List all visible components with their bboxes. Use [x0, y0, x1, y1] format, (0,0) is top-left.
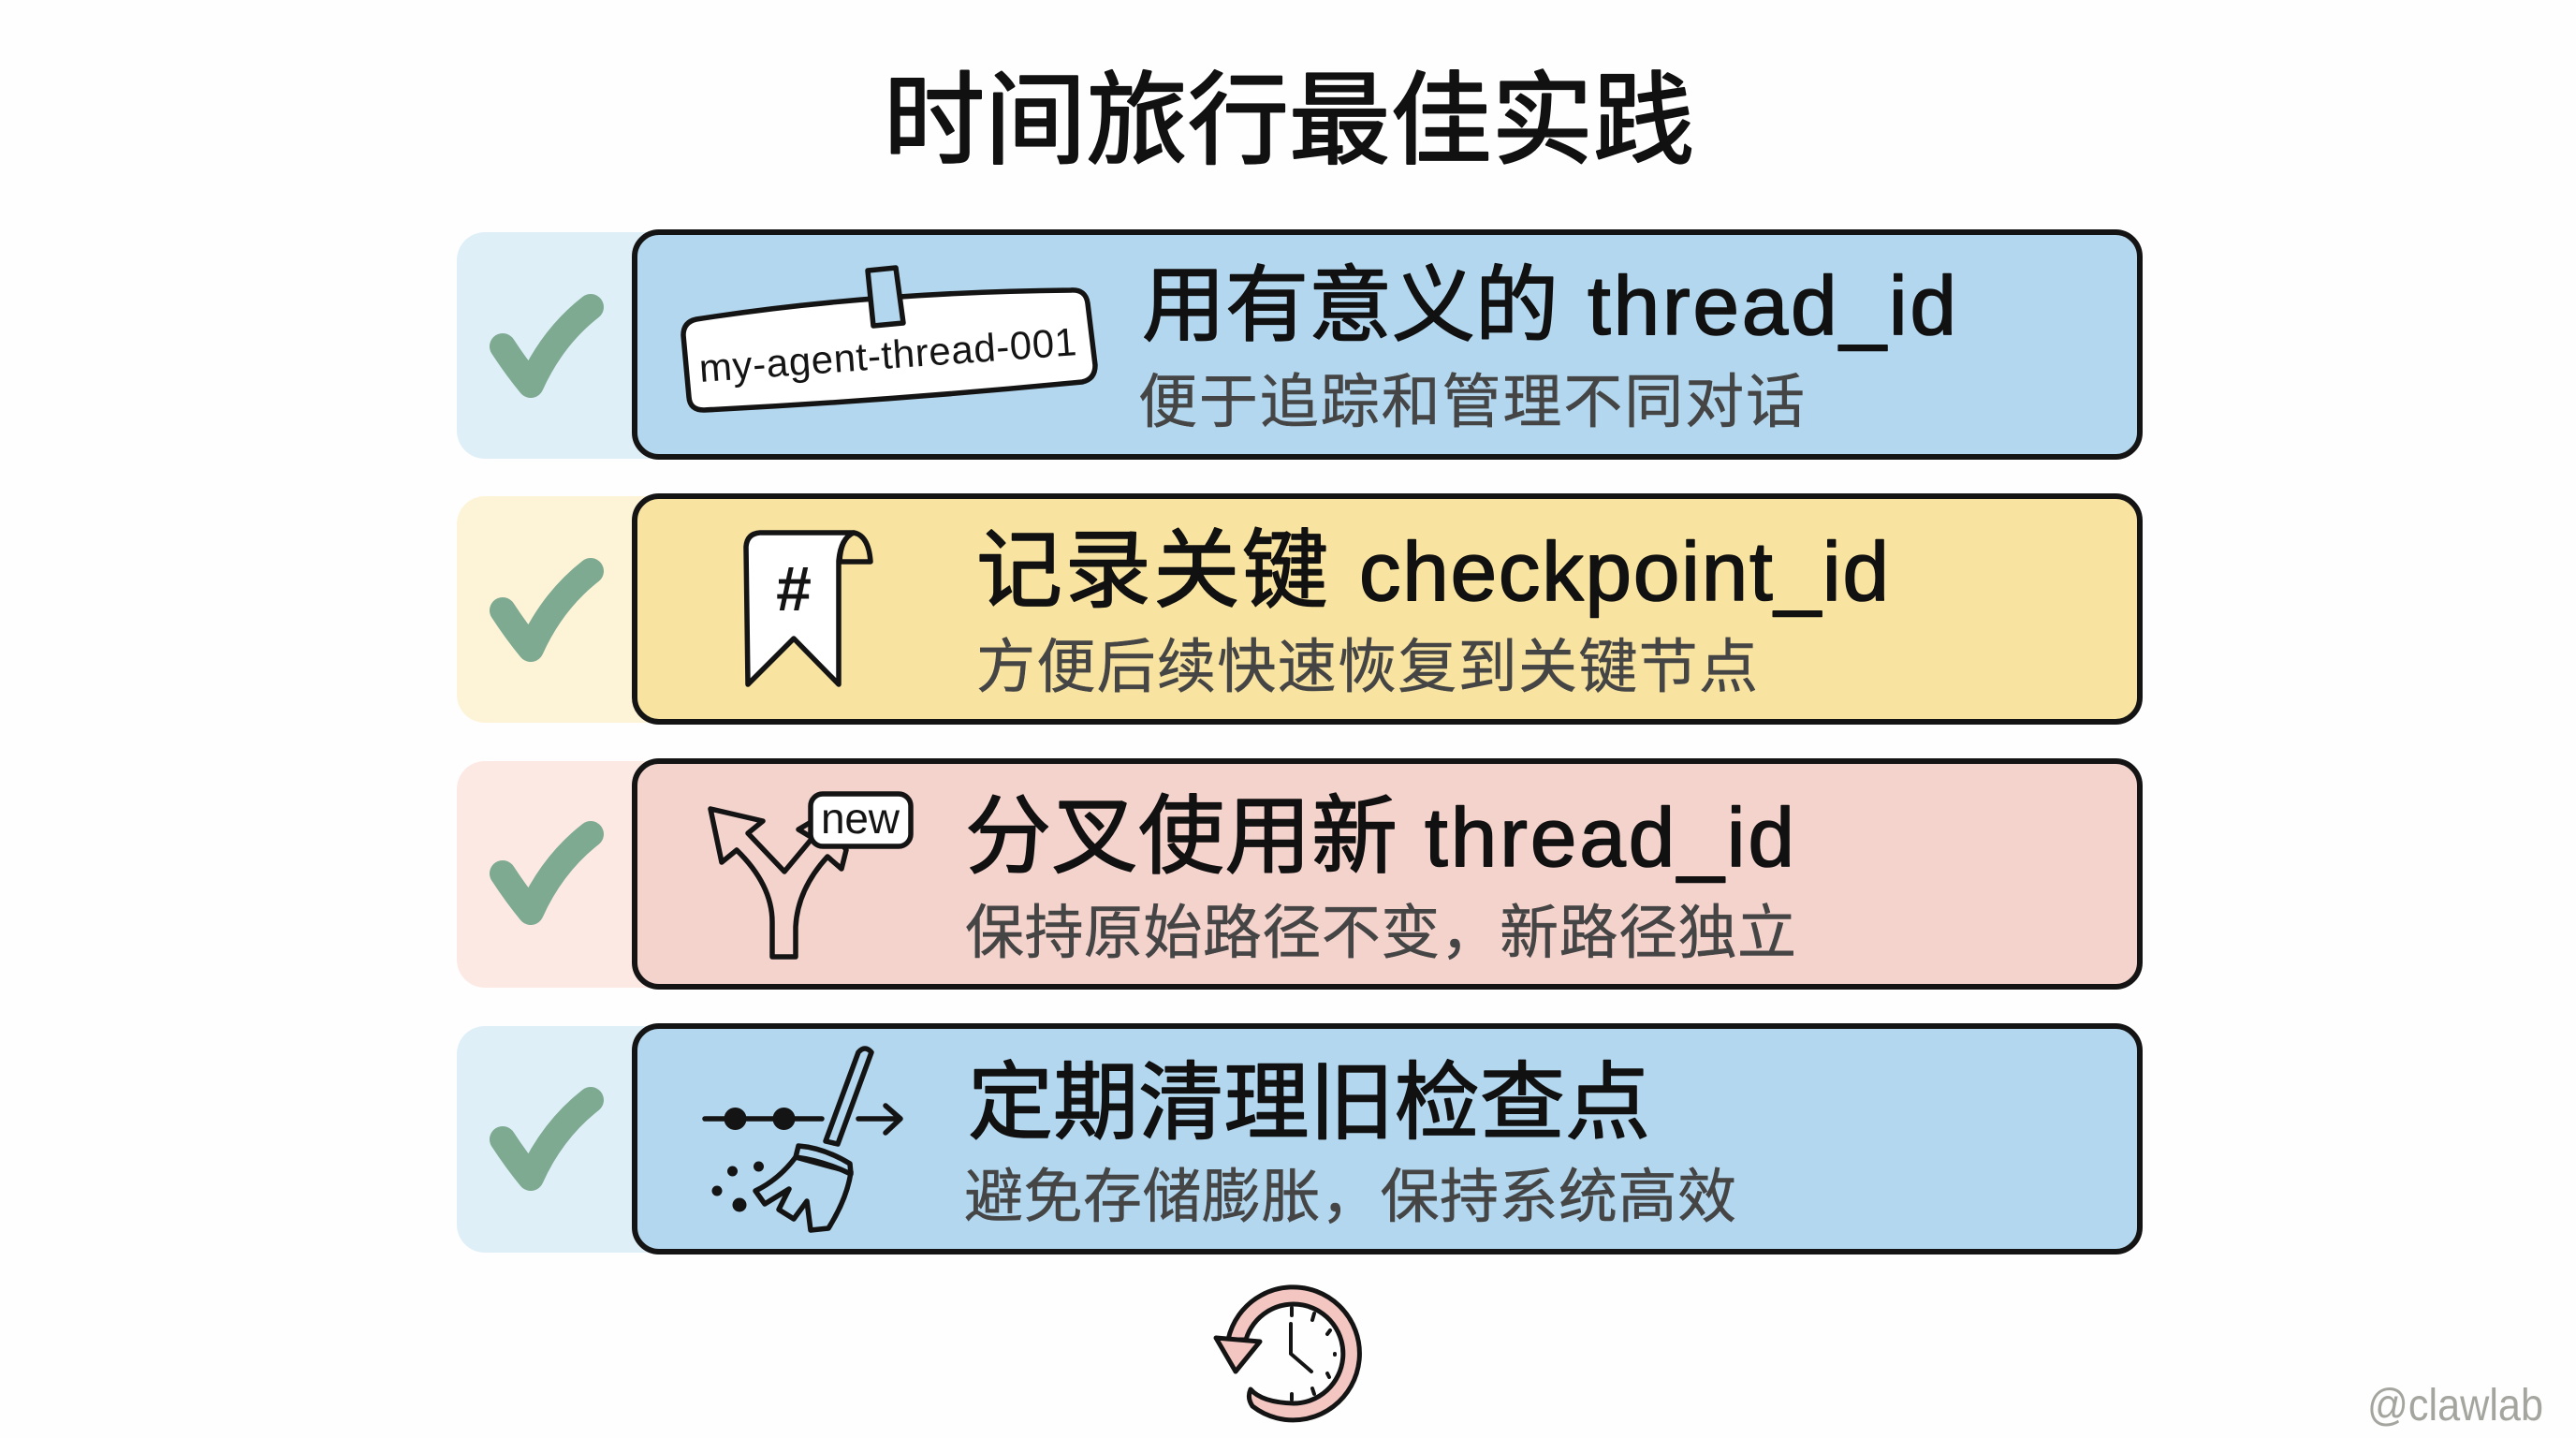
- check mark: [503, 834, 591, 912]
- subtitle: 保持原始路径不变，新路径独立: [965, 901, 1796, 966]
- heading: [965, 789, 1794, 885]
- heading: [1142, 258, 1956, 352]
- icon: id tag: [683, 268, 1095, 410]
- icon: broom sweeping timeline: [705, 1049, 900, 1230]
- icon: bookmark: #: [776, 553, 812, 624]
- icon: fork arrow: new: [821, 794, 900, 843]
- icon: fork arrow: [710, 794, 911, 957]
- icon: clock with rewind arrow: [1216, 1287, 1359, 1420]
- subtitle: 方便后续快速恢复到关键节点: [976, 635, 1758, 700]
- heading: 分叉使用新: [965, 789, 1398, 885]
- card: [635, 496, 2140, 722]
- heading: 定期清理旧检查点: [968, 1056, 1650, 1151]
- card: [635, 1026, 2140, 1252]
- card: [635, 761, 2140, 987]
- panel: record checkpoint_id: [457, 496, 2140, 723]
- check tab: [457, 232, 700, 459]
- check mark: [503, 571, 591, 649]
- heading: [976, 523, 1889, 619]
- icon: bookmark: [746, 533, 871, 684]
- heading: thread_id: [1588, 258, 1956, 352]
- heading: checkpoint_id: [1359, 524, 1889, 618]
- icon: id tag: my-agent-thread-001: [697, 319, 1078, 390]
- heading: 记录关键: [976, 523, 1328, 619]
- subtitle: 避免存储膨胀，保持系统高效: [964, 1165, 1736, 1230]
- subtitle: 便于追踪和管理不同对话: [1138, 370, 1805, 435]
- card: [635, 232, 2140, 457]
- watermark: @clawlab: [2367, 1381, 2543, 1431]
- panel: fork new thread_id: [457, 761, 2140, 988]
- check tab: [457, 1026, 700, 1253]
- check mark: [503, 307, 591, 385]
- title: 时间旅行最佳实践: [884, 64, 1694, 177]
- panel: clean old checkpoints: [457, 1026, 2140, 1253]
- heading: 用有意义的: [1142, 258, 1559, 352]
- check tab: [457, 496, 700, 723]
- check tab: [457, 761, 700, 988]
- heading: thread_id: [1425, 790, 1794, 884]
- panel: meaningful thread_id: [457, 232, 2140, 459]
- check mark: [503, 1100, 591, 1178]
